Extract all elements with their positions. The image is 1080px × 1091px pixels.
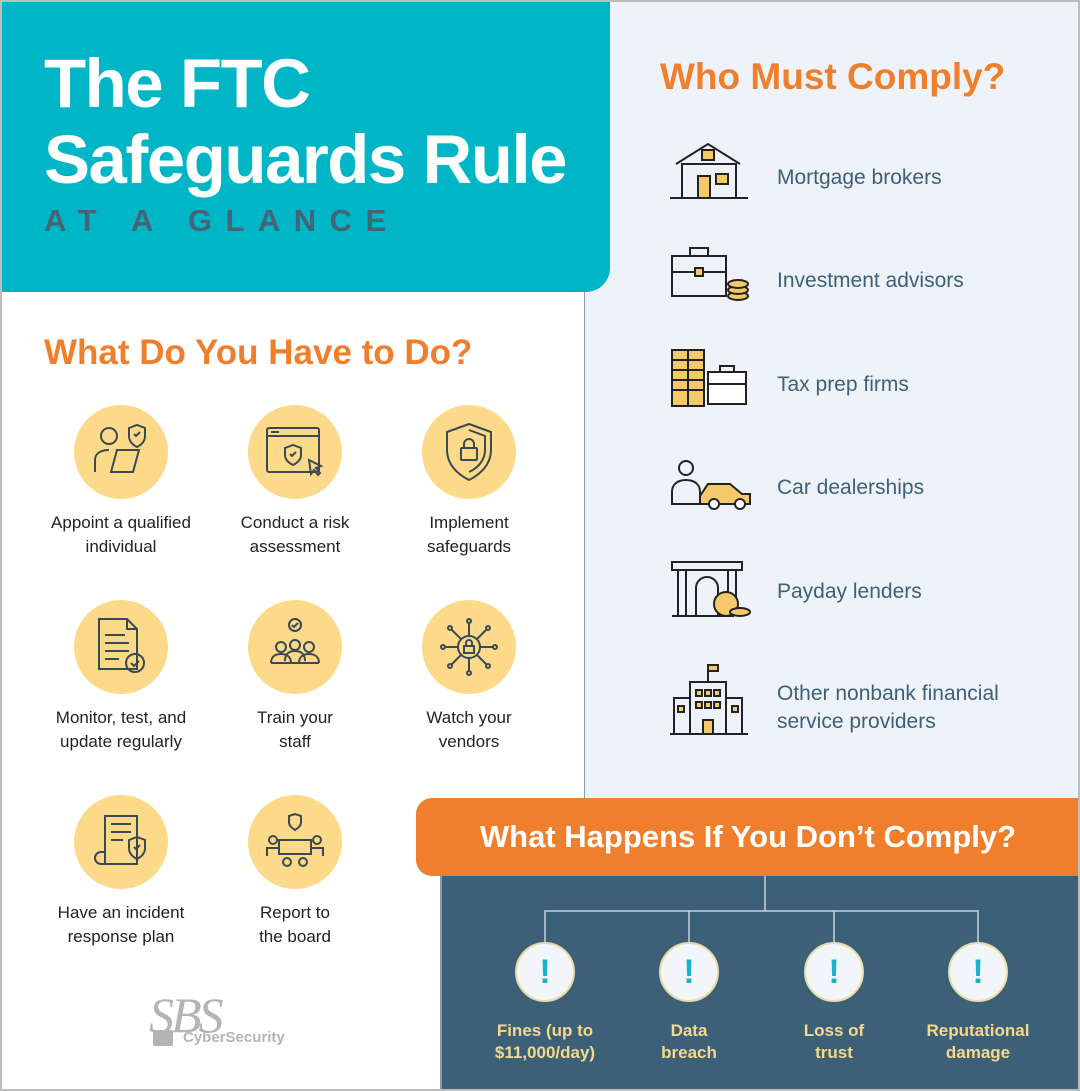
item: monitor bbox=[56, 600, 186, 751]
item: incident response: Have an incident bbox=[58, 903, 184, 922]
logo: SBS CyberSecurity bbox=[149, 987, 285, 1046]
consequence: data breach: ! bbox=[683, 953, 695, 991]
item: report to board bbox=[248, 795, 342, 946]
text: other nonbank: Other nonbank financial bbox=[777, 682, 999, 705]
item: train staff: Train your bbox=[257, 708, 333, 727]
item: implement safeguards bbox=[422, 405, 516, 556]
icon: briefcase coins bbox=[671, 247, 749, 301]
item: implement safeguards: Implement bbox=[429, 513, 509, 532]
icon: building briefcase bbox=[671, 349, 747, 407]
item: appoint bbox=[51, 405, 191, 556]
consequence: reputational damage: Reputational bbox=[927, 1021, 1029, 1040]
title: The FTC bbox=[44, 45, 309, 122]
item: vendors: vendors bbox=[439, 732, 499, 751]
item: risk assessment: Conduct a risk bbox=[241, 513, 349, 532]
icon: house bbox=[670, 142, 748, 199]
item: risk assessment: assessment bbox=[250, 537, 340, 556]
icon: car dealer bbox=[671, 460, 751, 510]
logo: SBS CyberSecurity: CyberSecurity bbox=[183, 1029, 285, 1046]
consequence: loss of trust: ! bbox=[828, 953, 840, 991]
consequence: data breach bbox=[659, 942, 719, 1062]
consequence: data breach: Data bbox=[671, 1021, 707, 1040]
item: risk assessment bbox=[241, 405, 350, 556]
consequence: fines: ! bbox=[539, 953, 551, 991]
text: other nonbank: service providers bbox=[777, 710, 936, 733]
subtitle: AT A GLANCE bbox=[44, 203, 400, 238]
item: vendors bbox=[422, 600, 516, 751]
heading: what do you have to do: What Do You Have to Do? bbox=[44, 333, 472, 372]
text: other nonbank bbox=[777, 682, 999, 733]
item: monitor: update regularly bbox=[60, 732, 182, 751]
left divider bbox=[584, 290, 585, 1091]
icon: office building bbox=[670, 664, 748, 735]
text: investment advisors: Investment advisors bbox=[777, 269, 964, 292]
consequence: loss of trust bbox=[804, 942, 864, 1062]
panel: right background bbox=[584, 0, 1080, 800]
item: incident response bbox=[58, 795, 184, 946]
item: report to board: the board bbox=[259, 927, 331, 946]
item: train staff bbox=[248, 600, 342, 751]
item: appoint: individual bbox=[86, 537, 156, 556]
heading: who must comply: Who Must Comply? bbox=[660, 56, 1005, 97]
title: Safeguards Rule bbox=[44, 121, 566, 198]
item: train staff: staff bbox=[279, 732, 311, 751]
logo: SBS CyberSecurity: SBS bbox=[149, 987, 221, 1043]
consequence: reputational damage: ! bbox=[972, 953, 984, 991]
consequence: loss of trust: Loss of bbox=[804, 1021, 864, 1040]
text: mortgage brokers: Mortgage brokers bbox=[777, 166, 942, 189]
item: incident response: response plan bbox=[68, 927, 174, 946]
item: report to board: Report to bbox=[260, 903, 330, 922]
consequence: data breach: breach bbox=[661, 1043, 717, 1062]
text: tax prep: Tax prep firms bbox=[777, 373, 909, 396]
consequence: loss of trust: trust bbox=[815, 1043, 853, 1062]
title bbox=[44, 45, 566, 198]
heading bar: what happens: What Happens If You Don’t Comply? bbox=[480, 819, 1016, 854]
icon: bank coins bbox=[671, 561, 751, 617]
tree connectors bbox=[544, 876, 979, 942]
item: monitor: Monitor, test, and bbox=[56, 708, 186, 727]
text: payday lenders: Payday lenders bbox=[777, 580, 922, 603]
panel: title header bbox=[0, 0, 610, 292]
panel: consequences dark bbox=[440, 860, 1080, 1089]
consequence: fines: Fines (up to bbox=[497, 1021, 593, 1040]
text: car dealerships: Car dealerships bbox=[777, 476, 924, 499]
item: vendors: Watch your bbox=[426, 708, 512, 727]
consequence: reputational damage bbox=[927, 942, 1029, 1062]
heading bar: what happens bbox=[416, 798, 1080, 876]
item: implement safeguards: safeguards bbox=[427, 537, 511, 556]
consequence: fines bbox=[495, 942, 595, 1062]
item: appoint: Appoint a qualified bbox=[51, 513, 191, 532]
consequence: reputational damage: damage bbox=[946, 1043, 1010, 1062]
consequence: fines: $11,000/day) bbox=[495, 1043, 595, 1062]
